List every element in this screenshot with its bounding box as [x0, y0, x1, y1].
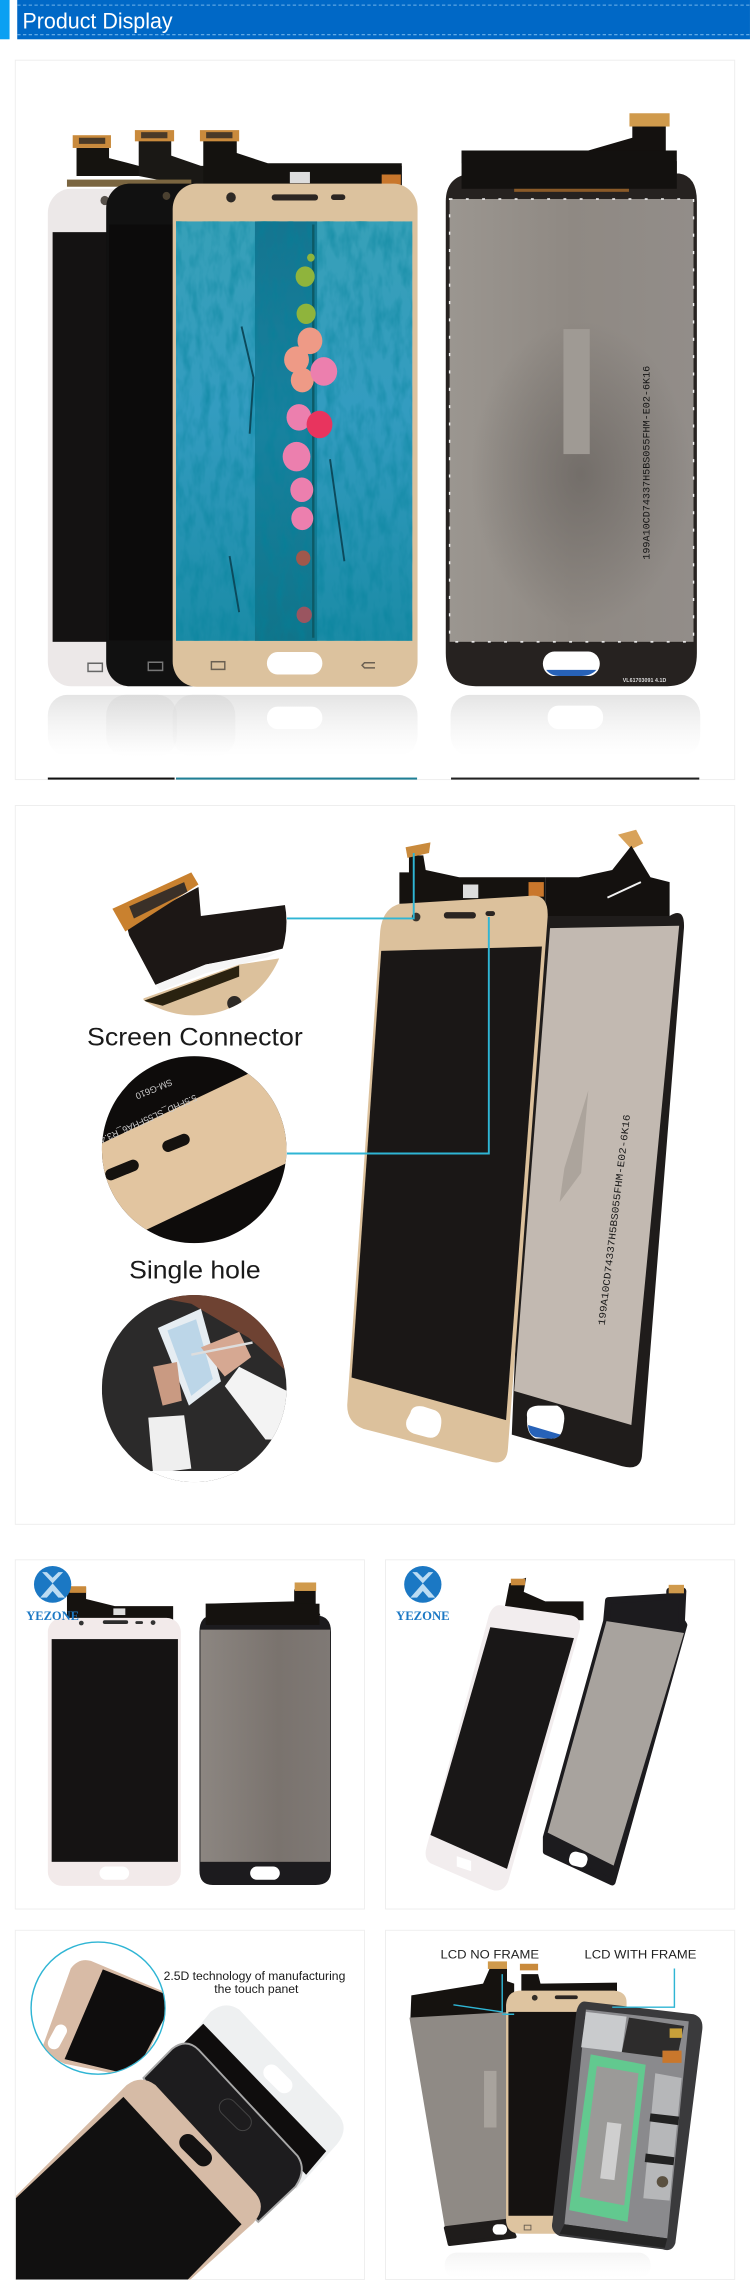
white phone front: [48, 1618, 181, 1886]
phone front tilted: [426, 1578, 584, 1891]
back of tilted phone: [512, 830, 684, 1467]
gold phone with wallpaper: [173, 184, 418, 687]
gold lcd front: [506, 1964, 627, 2234]
header: Product Display: [0, 0, 750, 39]
circle: person using phone: [102, 1295, 287, 1483]
black phone back: [199, 1582, 331, 1885]
front flex cable: [399, 842, 545, 904]
panel: white phone front and back: [15, 1560, 364, 1909]
detail circle: [31, 1942, 165, 2078]
label: LCD with frame: LCD WITH FRAME: [584, 1948, 696, 1962]
logo: YEZONE: [26, 1566, 79, 1623]
flex cables of front phones: [67, 130, 402, 187]
header: Product Display: Product Display: [22, 8, 173, 34]
panel: product lineup: [15, 60, 735, 780]
phone back tilted: [546, 1585, 684, 1882]
white phone angled: [184, 2005, 344, 2189]
caption: 2.5D technology: 2.5D technology of manufacturing: [164, 1969, 345, 1983]
caption: 2.5D technology: [164, 1969, 345, 1996]
circle: single hole: 5.5FHD_SL55FHA6_R3.4: [99, 1093, 198, 1145]
panel: feature callouts: [15, 806, 735, 1524]
flex cables: [67, 1586, 173, 1620]
panel: tilted phones with logo: [386, 1560, 735, 1909]
black phone: [106, 184, 250, 686]
connector lines: [453, 1968, 674, 2014]
gold phone angled: [16, 2080, 261, 2280]
back of lcd: [409, 1961, 515, 2244]
circle: single hole: [96, 1056, 297, 1243]
label: LCD no frame: LCD NO FRAME: [441, 1948, 539, 1962]
reflections: [48, 695, 700, 780]
white phone: [48, 189, 220, 686]
logo: YEZONE: YEZONE: [396, 1609, 450, 1623]
label: single hole: Single hole: [129, 1256, 261, 1285]
circle: screen connector: [112, 872, 286, 1016]
connector line 2: [287, 917, 489, 1154]
lcd with frame: [552, 2002, 702, 2250]
panel: LCD with and without frame: [386, 1930, 735, 2279]
gold phone tilted: [347, 896, 548, 1463]
reflection: [445, 2253, 650, 2279]
connector line 1: [287, 853, 414, 918]
back of phone: VL61703091 4.1D: [623, 678, 666, 684]
angled phones: [16, 2005, 344, 2280]
label: screen connector: Screen Connector: [87, 1023, 303, 1051]
back of phone: [446, 113, 697, 686]
logo: YEZONE: [396, 1566, 450, 1623]
panel: 2.5D touch panel: [15, 1930, 364, 2280]
caption: 2.5D technology: the touch panet: [214, 1982, 299, 1996]
logo: YEZONE: YEZONE: [26, 1609, 79, 1623]
back of phone: 199A10CD74337H5BS055FHM-E02-6K16: [642, 366, 653, 560]
black phone angled: [143, 2044, 302, 2222]
circle: single hole: SM-G610: [134, 1077, 174, 1101]
back of tilted phone: 199A10CD74337H5BS055FHM-E02-6K16: [598, 1114, 634, 1326]
